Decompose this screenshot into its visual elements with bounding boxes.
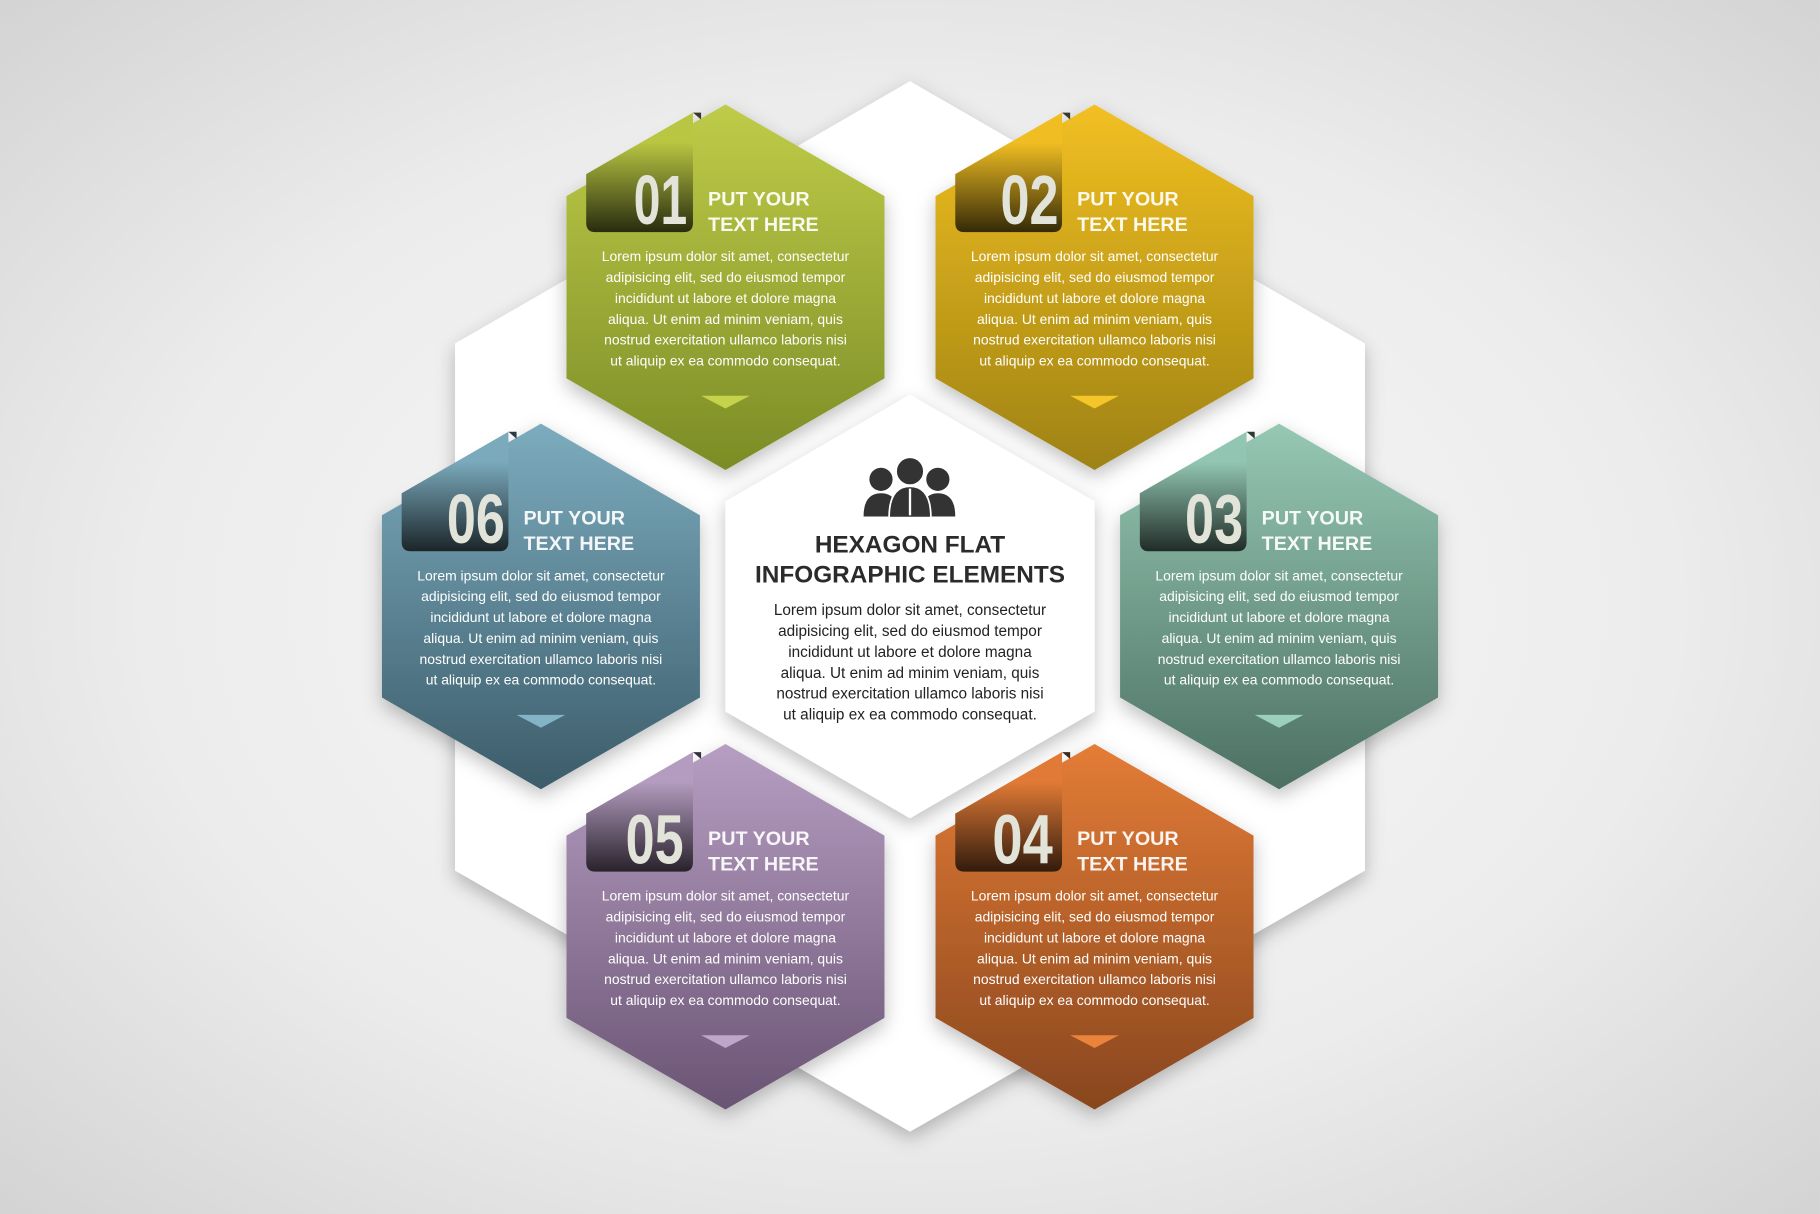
panel: 01: adipisicing elit, sed do eiusmod tempor — [606, 269, 846, 285]
panel: 05: ut aliquip ex ea commodo consequat. — [610, 992, 841, 1008]
panel: 04: ut aliquip ex ea commodo consequat. — [979, 992, 1210, 1008]
panel: 04: PUT YOUR — [1077, 828, 1179, 850]
center title: HEXAGON FLAT — [815, 531, 1005, 558]
panel: 04: TEXT HERE — [1077, 853, 1188, 875]
panel: 02: PUT YOUR — [1077, 188, 1179, 210]
panel: 06 — [382, 424, 700, 789]
panel: 06: adipisicing elit, sed do eiusmod tempor — [421, 588, 661, 604]
center body text: aliqua. Ut enim ad minim veniam, quis — [781, 665, 1040, 682]
panel: 04 — [936, 744, 1254, 1110]
panel: 04: incididunt ut labore et dolore magna — [984, 929, 1205, 945]
panel: 06: incididunt ut labore et dolore magna — [430, 609, 652, 625]
panel: 01: incididunt ut labore et dolore magna — [615, 290, 836, 306]
panel: 03 — [1120, 424, 1438, 789]
panel: 02: TEXT HERE — [1077, 214, 1188, 236]
center hexagon — [725, 395, 1095, 818]
panel: 02: ut aliquip ex ea commodo consequat. — [979, 353, 1210, 369]
panel: 03: nostrud exercitation ullamco laboris nisi — [1158, 651, 1400, 667]
center body text: nostrud exercitation ullamco laboris nisi — [776, 686, 1044, 703]
panel: 06: Lorem ipsum dolor sit amet, consectetur — [417, 567, 665, 583]
panel: 01: TEXT HERE — [708, 214, 819, 236]
panel: 03: adipisicing elit, sed do eiusmod tempor — [1159, 588, 1399, 604]
panel: 01: nostrud exercitation ullamco laboris nisi — [604, 332, 847, 348]
panel: 02: nostrud exercitation ullamco laboris nisi — [973, 332, 1216, 348]
center body text: Lorem ipsum dolor sit amet, consectetur — [774, 602, 1046, 619]
panel: 02: Lorem ipsum dolor sit amet, consectetur — [971, 248, 1219, 264]
panel: 05: aliqua. Ut enim ad minim veniam, quis — [608, 950, 843, 966]
panel: 04: Lorem ipsum dolor sit amet, consectetur — [971, 888, 1219, 904]
panel: 05: adipisicing elit, sed do eiusmod tempor — [606, 909, 846, 925]
panel: 04: 04 — [992, 800, 1053, 878]
panel: 03: incididunt ut labore et dolore magna — [1169, 609, 1390, 625]
panel: 01: aliqua. Ut enim ad minim veniam, quis — [608, 311, 843, 327]
panel: 06: TEXT HERE — [524, 533, 634, 555]
panel: 06: PUT YOUR — [524, 508, 625, 530]
panel: 02: 02 — [1001, 161, 1059, 239]
panel: 05: TEXT HERE — [708, 853, 819, 875]
panel: 02: incididunt ut labore et dolore magna — [984, 290, 1205, 306]
panel: 05: nostrud exercitation ullamco laboris nisi — [604, 971, 847, 987]
panel: 04: aliqua. Ut enim ad minim veniam, quis — [977, 950, 1212, 966]
panel: 01: Lorem ipsum dolor sit amet, consectetur — [602, 248, 849, 264]
panel: 03: PUT YOUR — [1262, 508, 1363, 530]
panel: 06: aliqua. Ut enim ad minim veniam, quis — [423, 630, 658, 646]
panel: 01: PUT YOUR — [708, 188, 810, 210]
panel: 02: adipisicing elit, sed do eiusmod tempor — [975, 269, 1215, 285]
panel: 06: nostrud exercitation ullamco laboris nisi — [420, 651, 662, 667]
big white hexagon background — [455, 81, 1365, 1132]
panel: 05: incididunt ut labore et dolore magna — [615, 929, 836, 945]
panel: 03: 03 — [1185, 480, 1243, 558]
panel: 04: adipisicing elit, sed do eiusmod tempor — [975, 909, 1215, 925]
panel: 03: ut aliquip ex ea commodo consequat. — [1164, 672, 1394, 688]
panel: 02 — [936, 104, 1254, 470]
panel: 03: Lorem ipsum dolor sit amet, consectetur — [1155, 567, 1403, 583]
panel: 03: TEXT HERE — [1262, 533, 1372, 555]
panel: 05: Lorem ipsum dolor sit amet, consectetur — [602, 888, 849, 904]
panel: 03: aliqua. Ut enim ad minim veniam, quis — [1162, 630, 1397, 646]
panel: 05: 05 — [626, 800, 684, 878]
center body text: ut aliquip ex ea commodo consequat. — [783, 707, 1037, 724]
center hexagon: INFOGRAPHIC ELEMENTS — [755, 562, 1065, 589]
center body text: adipisicing elit, sed do eiusmod tempor — [778, 623, 1042, 640]
panel: 05 — [566, 744, 884, 1110]
panel: 01 — [566, 104, 884, 470]
panel: 06: 06 — [447, 480, 505, 558]
panel: 02: aliqua. Ut enim ad minim veniam, quis — [977, 311, 1212, 327]
panel: 04: nostrud exercitation ullamco laboris nisi — [973, 971, 1216, 987]
panel: 05: PUT YOUR — [708, 828, 810, 850]
center body text — [774, 602, 1046, 724]
panel: 06: ut aliquip ex ea commodo consequat. — [426, 672, 656, 688]
icon: people — [864, 457, 955, 518]
center body text: incididunt ut labore et dolore magna — [788, 644, 1032, 661]
panel: 01: 01 — [634, 161, 687, 239]
panel: 01: ut aliquip ex ea commodo consequat. — [610, 353, 841, 369]
